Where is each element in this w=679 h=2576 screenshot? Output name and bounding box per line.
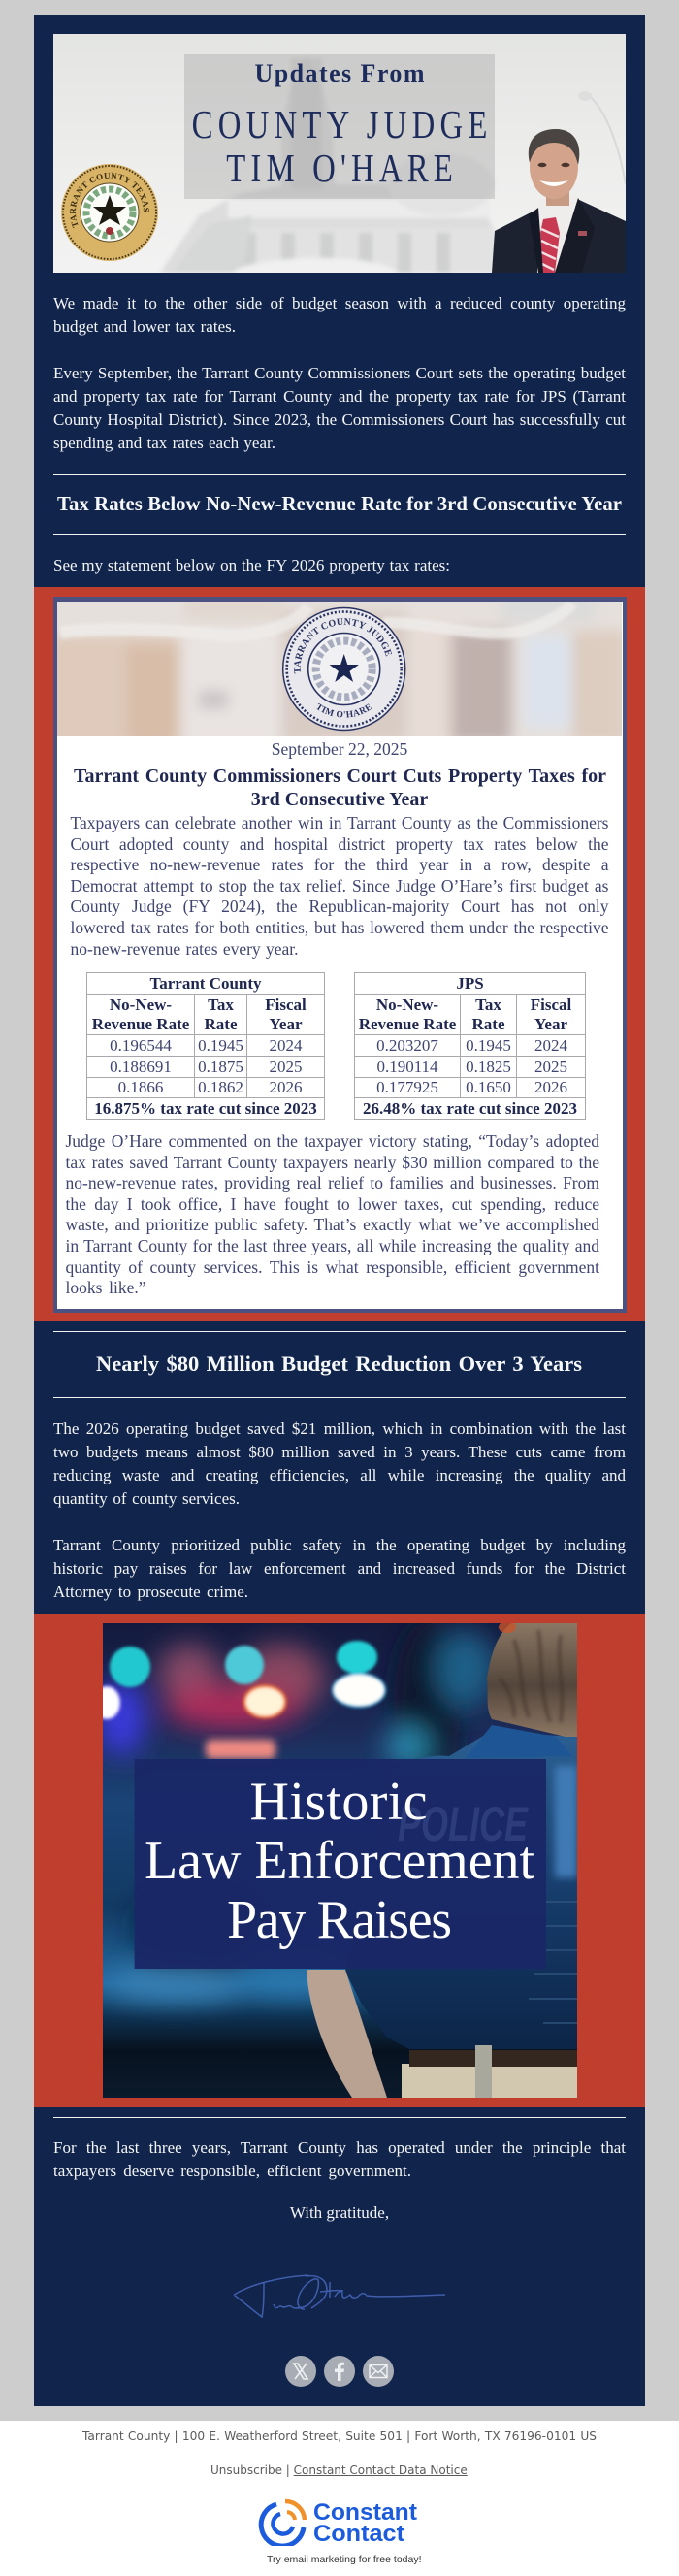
table: JPS rates: Rate: [471, 1015, 504, 1032]
table: JPS rates: Tax: [475, 995, 501, 1013]
text block: statement first paragraph: County Judge (FY 2024), the Republican-majority Court has not only: [70, 897, 609, 916]
table: Tarrant County rates: 2024: [270, 1036, 303, 1054]
text block: budget paragraph: The 2026 operating budget saved $21 million, which in combination with the last: [53, 1419, 626, 1438]
image: longhorn banner with judge seal: [57, 602, 622, 736]
text block: public safety paragraph: Attorney to prosecute crime.: [53, 1582, 248, 1601]
blurred lights: [97, 1620, 495, 2000]
table: JPS rates: Fiscal: [531, 995, 571, 1013]
banner title: Updates From: [254, 59, 425, 87]
table: JPS rates: 2025: [534, 1058, 567, 1075]
text block: Judge O'Hare quote: in Tarrant County for the last three years, all while increasing the quality and: [66, 1236, 599, 1255]
social icons: [285, 2356, 394, 2387]
text block: budget paragraph: two budgets means almost $80 million saved in 3 years. These cuts came from: [53, 1443, 626, 1461]
text block: statement intro: See my statement below on the FY 2026 property tax rates:: [53, 556, 450, 574]
logo: Constant Contact: [258, 2499, 417, 2546]
text block: statement first paragraph: lowered tax rates for both entities, but has lowered them under the respective: [70, 918, 609, 937]
table: JPS rates: 0.190114: [376, 1058, 438, 1075]
text block: September paragraph: [53, 364, 626, 452]
text block: public safety paragraph: [53, 1536, 626, 1601]
text: sign-off: With gratitude,: [290, 2203, 389, 2222]
officer: [307, 1621, 577, 2098]
text: statement date: September 22, 2025: [272, 739, 407, 759]
text block: closing paragraph: For the last three years, Tarrant County has operated under the principle that: [53, 2138, 626, 2157]
heading: statement title: Tarrant County Commissioners Court Cuts Property Taxes for: [74, 766, 606, 787]
table: JPS rates: 26.48% tax rate cut since 2023: [363, 1098, 577, 1118]
text block: Judge O'Hare quote: tax rates saved Tarrant County taxpayers nearly $30 million compared to the: [66, 1153, 599, 1172]
divider: [53, 534, 626, 535]
footer: unsubscribe links: Unsubscribe | Constant Contact Data Notice: [210, 2463, 468, 2477]
courthouse silhouette: [160, 56, 509, 273]
text block: September paragraph: and property tax rate for Tarrant County and the property tax rate for JPS (Tarrant: [53, 387, 626, 406]
icon: X: [285, 2356, 316, 2387]
panel: intro navy: [34, 15, 645, 587]
text block: Judge O'Hare quote: [66, 1131, 599, 1297]
panel: red image background: [34, 1614, 645, 2107]
text block: Judge O'Hare quote: no-new-revenue rates, providing real relief to families and businesses. From: [66, 1173, 599, 1192]
text block: Judge O'Hare quote: the day I took office, I have fought to lower taxes, cut spending, reduce: [66, 1194, 599, 1214]
heading: statement title: [74, 766, 606, 810]
image headline: [145, 1772, 534, 1950]
image: police officer with pay raises banner: [103, 1623, 577, 2098]
table: Tarrant County rates: Rate: [204, 1015, 237, 1032]
text block: budget paragraph: [53, 1419, 626, 1508]
divider: [53, 474, 626, 475]
table: Tarrant County rates: Tax: [208, 995, 234, 1013]
table: Tarrant County rates: Fiscal: [265, 995, 307, 1013]
panel: red statement background: [34, 587, 645, 1321]
image headline: Law Enforcement: [145, 1831, 534, 1891]
table: JPS rates: 0.1825: [466, 1058, 511, 1075]
table: JPS rates: 0.1650: [466, 1078, 511, 1096]
table: Tarrant County rates: No-New-: [110, 995, 172, 1013]
table: Tarrant County rates: 0.188691: [110, 1058, 172, 1075]
photo: Judge O'Hare: [492, 129, 626, 273]
table: JPS rates: 2024: [534, 1036, 567, 1054]
signature: [233, 2274, 445, 2319]
text block: Judge O'Hare quote: looks like.”: [66, 1278, 146, 1297]
text block: closing paragraph: taxpayers deserve responsible, efficient government.: [53, 2162, 411, 2180]
table: Tarrant County rates: 0.1875: [198, 1058, 243, 1075]
text block: closing paragraph: [53, 2138, 626, 2180]
image headline: Pay Raises: [227, 1890, 452, 1950]
text block: September paragraph: County Hospital District). Since 2023, the Commissioners Court has successfully cut: [53, 410, 626, 429]
vest lettering: POLICE: [398, 1797, 529, 1851]
banner title: TIM O'HARE: [226, 147, 453, 191]
table: Tarrant County rates: Year: [270, 1015, 303, 1032]
pay raises overlay box: [135, 1759, 546, 1969]
table: JPS rates: JPS: [456, 974, 484, 992]
table: JPS rates: [354, 972, 586, 1120]
text block: opening paragraph: [53, 294, 626, 336]
table: Tarrant County rates: 0.1945: [198, 1036, 243, 1054]
table: JPS rates: No-New-: [376, 995, 438, 1013]
table: JPS rates: 0.1945: [466, 1036, 511, 1054]
icon: email: [363, 2356, 394, 2387]
table: Tarrant County rates: Revenue Rate: [92, 1015, 189, 1032]
text block: Judge O'Hare quote: Judge O’Hare commented on the taxpayer victory stating, “Today’s adopted: [66, 1131, 599, 1151]
table: Tarrant County rates: 2025: [270, 1058, 303, 1075]
table: JPS rates: 0.177925: [376, 1078, 438, 1096]
text block: Judge O'Hare quote: waste, and prioritize public safety. That’s exactly what we’ve accomplished: [66, 1215, 599, 1234]
icon: judge seal: [281, 607, 405, 732]
longhorn cattle: [48, 594, 626, 747]
divider: [53, 1331, 626, 1332]
text block: budget paragraph: reducing waste and creating efficiencies, all while increasing the quality and: [53, 1466, 626, 1484]
text block: September paragraph: spending and tax rates each year.: [53, 434, 275, 452]
title backdrop: [184, 54, 495, 199]
table: Tarrant County rates: 2026: [270, 1078, 303, 1096]
panel: budget navy: [34, 1321, 645, 1614]
footer: address: Tarrant County | 100 E. Weatherford Street, Suite 501 | Fort Worth, TX 76196-0101 US: [82, 2429, 597, 2443]
banner title: COUNTY JUDGE: [192, 104, 487, 147]
text block: statement first paragraph: Democrat attempt to stop the tax relief. Since Judge O’Hare’s first budget as: [70, 876, 609, 896]
divider: [53, 1397, 626, 1398]
icon: judge seal: TARRANT COUNTY JUDGE: [294, 618, 392, 673]
text block: budget paragraph: quantity of county services.: [53, 1489, 240, 1508]
table: Tarrant County rates: 0.1866: [118, 1078, 163, 1096]
text block: Judge O'Hare quote: quantity of county services. This is what responsible, efficient government: [66, 1257, 599, 1277]
table: JPS rates: 2026: [534, 1078, 567, 1096]
banner title: [192, 59, 487, 191]
panel: closing navy: [34, 2107, 645, 2406]
icon: Facebook: [324, 2356, 355, 2387]
text block: public safety paragraph: Tarrant County prioritized public safety in the operating budget by including: [53, 1536, 626, 1554]
table: Tarrant County rates: 0.196544: [110, 1036, 172, 1054]
text block: opening paragraph: budget and lower tax rates.: [53, 317, 236, 336]
table: JPS rates: 0.203207: [376, 1036, 438, 1054]
text block: statement first paragraph: [70, 813, 609, 959]
text block: opening paragraph: We made it to the other side of budget season with a reduced county operating: [53, 294, 626, 312]
heading: tax rates: Tax Rates Below No-New-Revenue Rate for 3rd Consecutive Year: [57, 493, 622, 515]
icon: gold county seal: TARRANT COUNTY TEXAS: [70, 173, 149, 228]
image headline: Historic: [250, 1772, 427, 1832]
table: JPS rates: Revenue Rate: [359, 1015, 456, 1032]
text block: statement first paragraph: Taxpayers can celebrate another win in Tarrant County as the Commissioners: [70, 813, 609, 832]
text block: statement first paragraph: Court adopted county and hospital district property tax rates below the: [70, 834, 609, 854]
divider: [53, 2117, 626, 2118]
heading: budget reduction: Nearly $80 Million Budget Reduction Over 3 Years: [96, 1352, 582, 1376]
text block: public safety paragraph: historic pay raises for law enforcement and increased funds for the District: [53, 1559, 626, 1578]
footer: tagline: Try email marketing for free today!: [267, 2554, 421, 2565]
bokeh dots: [93, 1641, 385, 1719]
panel: press statement card: [53, 597, 627, 1313]
logo: Constant Contact: Constant: [313, 2499, 417, 2526]
text block: statement first paragraph: respective no-new-revenue rates for the third year in a row, despite a: [70, 855, 609, 874]
table: JPS rates: Year: [534, 1015, 567, 1032]
text block: statement first paragraph: no-new-revenue rates every year.: [70, 939, 299, 959]
heading: statement title: 3rd Consecutive Year: [251, 789, 428, 810]
table: Tarrant County rates: 0.1862: [198, 1078, 243, 1096]
table: Tarrant County rates: [86, 972, 325, 1120]
banner: courthouse header: [53, 34, 626, 273]
table: Tarrant County rates: 16.875% tax rate cut since 2023: [94, 1098, 317, 1118]
icon: judge seal: TIM O'HARE: [316, 702, 372, 718]
icon: gold county seal: [61, 164, 158, 261]
text block: September paragraph: Every September, the Tarrant County Commissioners Court sets the operating budget: [53, 364, 626, 382]
table: Tarrant County rates: Tarrant County: [149, 974, 262, 992]
